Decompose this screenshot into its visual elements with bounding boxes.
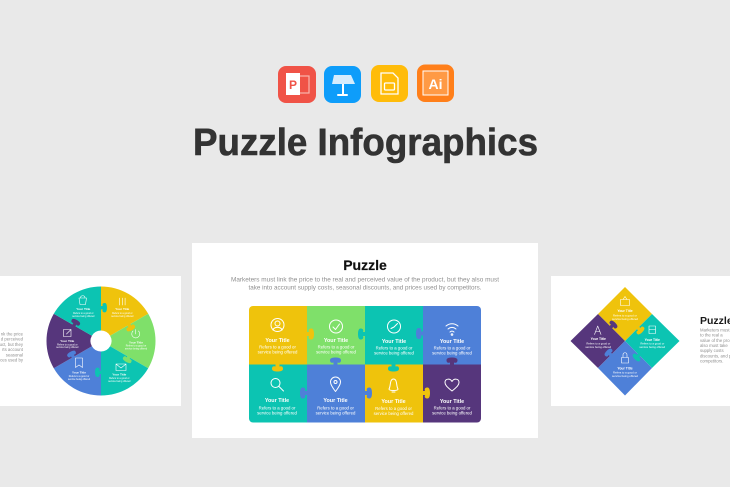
cell: check circle: service being offered xyxy=(316,350,357,355)
text block: cropped paragraph: d perceived xyxy=(1,336,24,342)
text block: cropped paragraph: seasonal xyxy=(6,352,23,358)
panel: right slide, diamond puzzle xyxy=(551,276,730,406)
cell: search: Your Title xyxy=(265,398,289,404)
segment: green xyxy=(125,330,148,350)
segment: purple: Your Title xyxy=(60,339,75,343)
text block: cropped paragraph xyxy=(0,332,24,362)
cell: wifi: service being offered xyxy=(432,351,473,356)
segment: yellow: Refers to a good or xyxy=(112,312,133,315)
cell: check circle xyxy=(316,320,357,355)
icon: Illustrator xyxy=(417,64,454,102)
cell: location pin: Your Title xyxy=(323,398,348,404)
piece: blue: Your Title xyxy=(617,366,633,370)
icon: PowerPoint: P xyxy=(289,78,297,92)
segment: teal upper: service being offered xyxy=(72,315,95,318)
piece: purple: Your Title xyxy=(591,337,606,341)
cell: bell: Your Title xyxy=(381,399,406,405)
icon: PowerPoint xyxy=(278,66,316,103)
segment: yellow xyxy=(111,298,134,318)
cell: user: Refers to a good or xyxy=(259,345,296,350)
text block: cropped paragraph: also must take xyxy=(700,343,728,348)
chart: puzzle diamond xyxy=(570,287,680,396)
text block: cropped paragraph: Marketers must xyxy=(700,328,730,332)
icon: Google Slides xyxy=(371,65,408,102)
title: Puzzle Infographics xyxy=(193,122,538,164)
segment: purple: service being offered xyxy=(56,346,79,349)
text block: cropped paragraph: nk the price xyxy=(1,332,24,336)
piece: purple: Refers to a good or xyxy=(586,341,610,345)
cell: location pin xyxy=(316,377,356,415)
heading: Puzzle: Puzzle xyxy=(343,257,387,273)
text block: description: take into account supply costs, seasonal discounts, and prices used by competitors. xyxy=(248,284,482,292)
piece: blue: Refers to a good or xyxy=(613,371,637,375)
cell: user xyxy=(258,318,298,355)
piece: teal: service being offered xyxy=(639,345,666,349)
icon: Keynote xyxy=(324,66,361,103)
cell: heart: Refers to a good or xyxy=(434,406,471,411)
segment: teal lower xyxy=(108,364,131,383)
segment: purple xyxy=(56,330,79,349)
text block: cropped paragraph: to the real a xyxy=(700,332,723,338)
text block: cropped paragraph: rts account xyxy=(2,347,24,352)
segment: teal upper: Refers to a good or xyxy=(73,312,94,315)
segment: green: Your Title xyxy=(129,340,143,344)
text block: cropped paragraph: competitors. xyxy=(700,358,723,364)
cell: heart: Your Title xyxy=(440,399,464,405)
text block: cropped paragraph: supply costs xyxy=(700,348,724,353)
cell: wifi xyxy=(432,324,473,356)
cell: heart xyxy=(432,379,473,416)
segment: green: Refers to a good or xyxy=(126,345,146,348)
segment: blue xyxy=(68,358,91,381)
cell: location pin: service being offered xyxy=(316,410,356,415)
cell: check circle: Your Title xyxy=(324,338,348,344)
text block: description: Marketers must link the price to the real and perceived value of the product, but they also must xyxy=(231,276,499,284)
text block: cropped paragraph xyxy=(700,328,730,364)
cell: user: Your Title xyxy=(265,338,290,344)
text block: cropped paragraph: value of the pro xyxy=(700,338,730,343)
chart: puzzle grid xyxy=(249,306,481,422)
piece: teal xyxy=(639,326,666,349)
text block: cropped paragraph: ces used by xyxy=(0,358,24,362)
piece: yellow: service being offered xyxy=(612,317,638,321)
panel: left slide, pie puzzle xyxy=(0,276,181,406)
cell: wifi: Refers to a good or xyxy=(434,346,471,351)
segment: teal upper: Your Title xyxy=(76,307,91,311)
segment: teal lower: Your Title xyxy=(112,372,127,376)
cell: location pin: Refers to a good or xyxy=(317,405,354,410)
piece: purple xyxy=(585,326,612,349)
segment: teal lower: service being offered xyxy=(108,380,131,383)
segment: blue: Your Title xyxy=(72,370,86,374)
piece: blue: service being offered xyxy=(612,374,638,378)
chart: puzzle wheel xyxy=(46,286,156,396)
segment: yellow: Your Title xyxy=(115,307,130,311)
cell: search: Refers to a good or xyxy=(259,405,296,410)
cell: bell xyxy=(374,379,414,416)
piece: teal: Refers to a good or xyxy=(640,342,664,346)
segment: yellow: service being offered xyxy=(111,315,134,318)
cell: bell: service being offered xyxy=(374,411,414,416)
panel: center slide xyxy=(192,243,538,438)
segment: teal lower: Refers to a good or xyxy=(109,377,130,380)
piece: blue xyxy=(612,353,638,378)
cell: search: service being offered xyxy=(257,410,298,415)
cell: search xyxy=(257,378,298,415)
app icons row xyxy=(278,64,454,103)
text block: cropped paragraph: uct, but they xyxy=(0,342,24,347)
piece: teal: Your Title xyxy=(645,338,660,342)
cell: clock: Your Title xyxy=(382,339,406,345)
segment: blue: Refers to a good or xyxy=(69,375,89,378)
icon: Illustrator: Ai xyxy=(428,76,442,92)
cell: clock: service being offered xyxy=(374,351,415,356)
cell: bell: Refers to a good or xyxy=(375,406,412,411)
segment: blue: service being offered xyxy=(68,378,91,381)
cell: user: service being offered xyxy=(258,350,298,355)
segment: green: service being offered xyxy=(125,347,148,350)
cell: wifi: Your Title xyxy=(440,339,464,345)
piece: yellow xyxy=(612,296,638,321)
cell: heart: service being offered xyxy=(432,411,473,416)
piece: yellow: Refers to a good or xyxy=(613,314,637,318)
piece: yellow: Your Title xyxy=(617,309,633,313)
segment: teal upper xyxy=(72,296,95,318)
segment: purple: Refers to a good or xyxy=(57,343,78,346)
piece: purple: service being offered xyxy=(585,345,612,349)
cell: clock xyxy=(374,320,415,356)
text block: description xyxy=(231,276,499,292)
cell: check circle: Refers to a good or xyxy=(318,345,355,350)
cell: clock: Refers to a good or xyxy=(376,346,413,351)
